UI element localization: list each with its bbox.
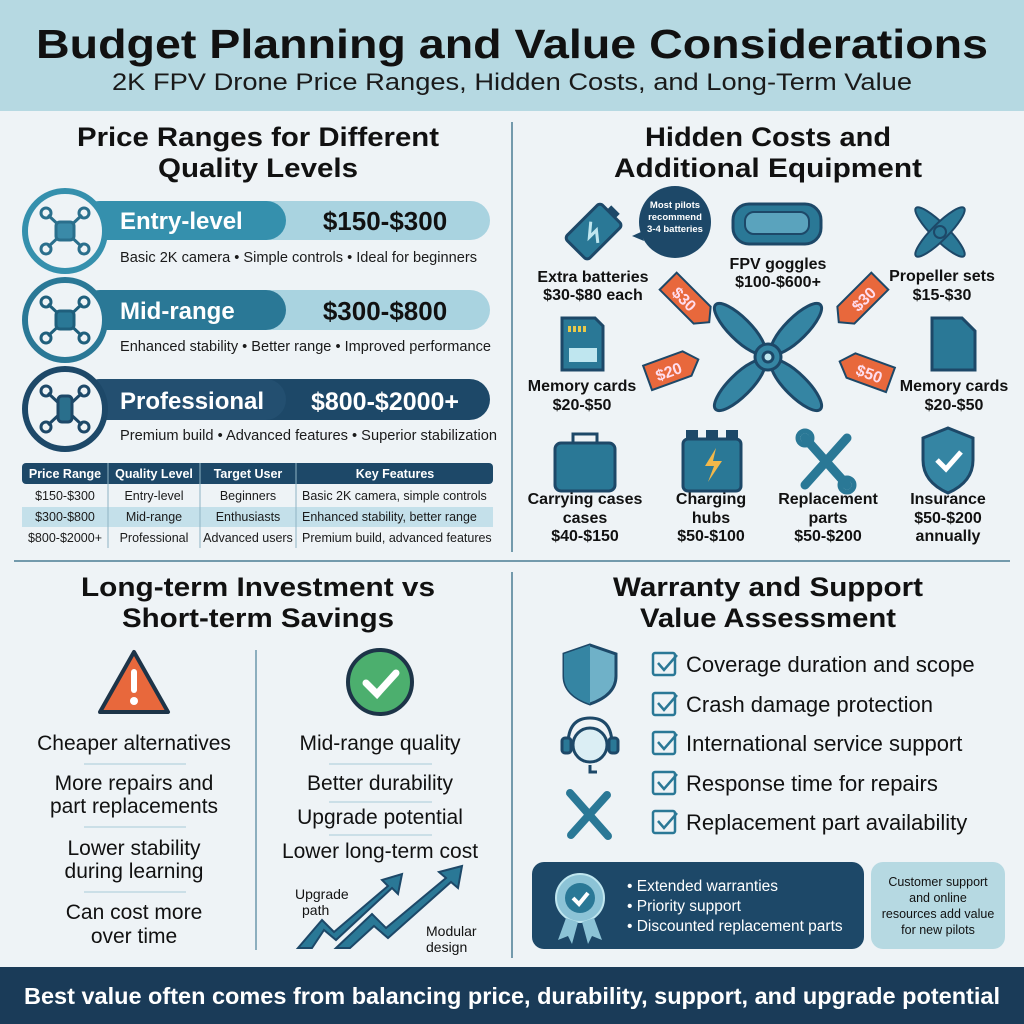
icon: shield <box>564 645 616 704</box>
tag: $30 right <box>830 273 888 331</box>
table: price comparison: Entry-level <box>124 489 184 503</box>
heading: long-term <box>81 572 435 633</box>
table: price comparison: Key Features <box>356 467 434 481</box>
footer banner: Best value often comes from balancing price, durability, support, and upgrade potential <box>24 983 1000 1009</box>
tag: $20: $20 <box>654 360 685 385</box>
label: memory left <box>528 378 636 414</box>
arrows: upgrade path: design <box>426 939 467 955</box>
list: short-term drawbacks: Cheaper alternatives <box>37 732 231 755</box>
checklist: Replacement part availability <box>686 810 967 835</box>
tag: $50 <box>835 349 895 392</box>
heading: long-term: Long-term Investment vs <box>81 572 435 602</box>
heading: price ranges <box>77 122 439 183</box>
icon: battery <box>565 198 627 261</box>
tier: mid-range <box>25 280 491 360</box>
label: propellers: $15-$30 <box>913 287 971 304</box>
tier: professional <box>25 369 497 449</box>
labels: bottom row costs <box>528 491 986 545</box>
tier: professional: $800-$2000+ <box>311 388 459 416</box>
callout: batteries <box>632 186 711 258</box>
table: price comparison: Advanced users <box>203 531 293 545</box>
labels: bottom row costs: Carrying cases <box>528 491 642 508</box>
arrows: upgrade path: Modular <box>426 923 477 939</box>
label: batteries: $30-$80 each <box>543 287 643 304</box>
table: price comparison: Target User <box>214 467 282 481</box>
panel: long-term vs short-term <box>37 572 478 955</box>
labels: bottom row costs: Insurance <box>910 491 986 508</box>
table: price comparison: Quality Level <box>115 467 193 481</box>
label: memory left: Memory cards <box>528 378 636 395</box>
table: price comparison <box>22 463 493 548</box>
callout: batteries: Most pilots <box>650 200 700 211</box>
arrows: upgrade path: Upgrade <box>295 886 349 902</box>
tag: $20 <box>643 347 703 390</box>
tier: entry-level: Entry-level <box>120 208 243 235</box>
label: memory left: $20-$50 <box>553 397 611 414</box>
tier: entry-level <box>25 191 490 271</box>
tier: professional: Premium build • Advanced features • Superior stabilization <box>120 427 497 444</box>
tier: mid-range: $300-$800 <box>323 296 447 326</box>
label: goggles <box>730 256 827 291</box>
icon: memory card right <box>932 318 975 370</box>
icon: goggles <box>733 204 821 244</box>
labels: bottom row costs: $50-$100 <box>677 528 745 545</box>
list: long-term benefits: Lower long-term cost <box>282 840 478 863</box>
labels: bottom row costs: $50-$200 <box>794 528 862 545</box>
table: price comparison: Enthusiasts <box>216 510 280 524</box>
subtitle: 2K FPV Drone Price Ranges, Hidden Costs, and Long-Term Value <box>112 69 912 96</box>
box: customer support note: for new pilots <box>901 923 975 937</box>
header band <box>0 0 1024 111</box>
list: long-term benefits <box>282 732 478 863</box>
labels: bottom row costs: Charging <box>676 491 746 508</box>
list: short-term drawbacks: over time <box>91 925 177 948</box>
callout: batteries: 3-4 batteries <box>647 224 703 235</box>
checklist: Crash damage protection <box>686 692 933 717</box>
checklist <box>653 652 975 835</box>
box: warranty perks <box>532 862 864 949</box>
footer banner <box>0 967 1024 1024</box>
icon: headset <box>562 718 618 772</box>
heading: warranty: Warranty and Support <box>613 572 923 602</box>
labels: bottom row costs: hubs <box>692 510 730 527</box>
tier: entry-level: Basic 2K camera • Simple controls • Ideal for beginners <box>120 249 477 266</box>
icon: charging hub <box>683 430 741 491</box>
heading: hidden costs <box>614 122 922 183</box>
heading: hidden costs: Additional Equipment <box>614 153 922 183</box>
table: price comparison: $150-$300 <box>35 489 95 503</box>
tier: mid-range: Enhanced stability • Better range • Improved performance <box>120 338 491 355</box>
heading: warranty: Value Assessment <box>640 603 896 633</box>
title: Budget Planning and Value Considerations <box>36 21 988 67</box>
checklist: International service support <box>686 731 962 756</box>
box: customer support note: Customer support <box>888 875 988 889</box>
tag: $30 left: $30 <box>668 284 699 315</box>
labels: bottom row costs: $40-$150 <box>551 528 619 545</box>
label: batteries <box>537 269 649 304</box>
labels: bottom row costs: cases <box>563 510 607 527</box>
list: long-term benefits: Upgrade potential <box>297 806 463 829</box>
label: propellers <box>889 268 995 304</box>
table: price comparison: $300-$800 <box>35 510 95 524</box>
labels: bottom row costs: $50-$200 <box>914 510 982 527</box>
box: customer support note: and online <box>909 891 967 905</box>
icon: warning <box>100 652 168 712</box>
panel: warranty and support <box>532 572 1005 949</box>
tier: mid-range: Mid-range <box>120 298 235 325</box>
list: short-term drawbacks: during learning <box>65 860 203 883</box>
table: price comparison: Basic 2K camera, simple controls <box>302 489 487 503</box>
tier: entry-level: $150-$300 <box>323 206 447 236</box>
heading: long-term: Short-term Savings <box>122 603 394 633</box>
labels: bottom row costs: parts <box>808 510 848 527</box>
arrows: upgrade path <box>295 866 477 955</box>
list: long-term benefits: Better durability <box>307 772 453 795</box>
icon: wrench screwdriver <box>570 793 608 836</box>
heading: warranty <box>613 572 923 633</box>
labels: bottom row costs: annually <box>916 528 981 545</box>
checklist: Response time for repairs <box>686 771 938 796</box>
panel: hidden costs <box>528 122 1008 545</box>
icon: big propeller <box>708 297 828 417</box>
table: price comparison: Enhanced stability, better range <box>302 510 477 524</box>
box: warranty perks: • Discounted replacement parts <box>627 918 843 935</box>
panel: price ranges <box>22 122 497 548</box>
label: batteries: Extra batteries <box>537 269 649 286</box>
heading: price ranges: Price Ranges for Different <box>77 122 439 152</box>
list: long-term benefits: Mid-range quality <box>299 732 461 755</box>
list: short-term drawbacks: part replacements <box>50 795 218 818</box>
table: price comparison: Price Range <box>29 467 101 481</box>
tag: $30 left <box>660 273 718 331</box>
checklist: Coverage duration and scope <box>686 652 975 677</box>
table: price comparison: Professional <box>120 531 188 545</box>
icon: check circle <box>348 650 412 714</box>
list: short-term drawbacks <box>37 732 231 948</box>
list: short-term drawbacks: Can cost more <box>66 901 202 924</box>
label: memory right: $20-$50 <box>925 397 983 414</box>
label: memory right <box>900 378 1008 414</box>
tier: professional: Professional <box>120 388 264 415</box>
icon: insurance shield <box>923 428 973 493</box>
table: price comparison: Mid-range <box>126 510 182 524</box>
table: price comparison: $800-$2000+ <box>28 531 102 545</box>
box: customer support note: resources add value <box>882 907 994 921</box>
icon: memory card left <box>562 318 603 370</box>
box: customer support note <box>871 862 1005 949</box>
label: propellers: Propeller sets <box>889 268 995 285</box>
list: short-term drawbacks: More repairs and <box>55 772 213 795</box>
box: warranty perks: • Extended warranties <box>627 878 778 895</box>
heading: price ranges: Quality Levels <box>158 153 358 183</box>
tag: $50: $50 <box>853 362 884 387</box>
callout: batteries: recommend <box>648 212 702 223</box>
icon: tools <box>798 431 854 492</box>
heading: hidden costs: Hidden Costs and <box>645 122 891 152</box>
label: memory right: Memory cards <box>900 378 1008 395</box>
label: goggles: FPV goggles <box>730 256 827 273</box>
table: price comparison: Premium build, advanced features <box>302 531 492 545</box>
labels: bottom row costs: Replacement <box>778 491 878 508</box>
table: price comparison: Beginners <box>220 489 276 503</box>
box: warranty perks: • Priority support <box>627 898 742 915</box>
list: short-term drawbacks: Lower stability <box>67 837 201 860</box>
label: goggles: $100-$600+ <box>735 274 821 291</box>
icon: carrying case <box>555 434 615 491</box>
icon: propeller small <box>910 202 970 262</box>
tag: $30 right: $30 <box>849 284 880 315</box>
arrows: upgrade path: path <box>302 902 329 918</box>
